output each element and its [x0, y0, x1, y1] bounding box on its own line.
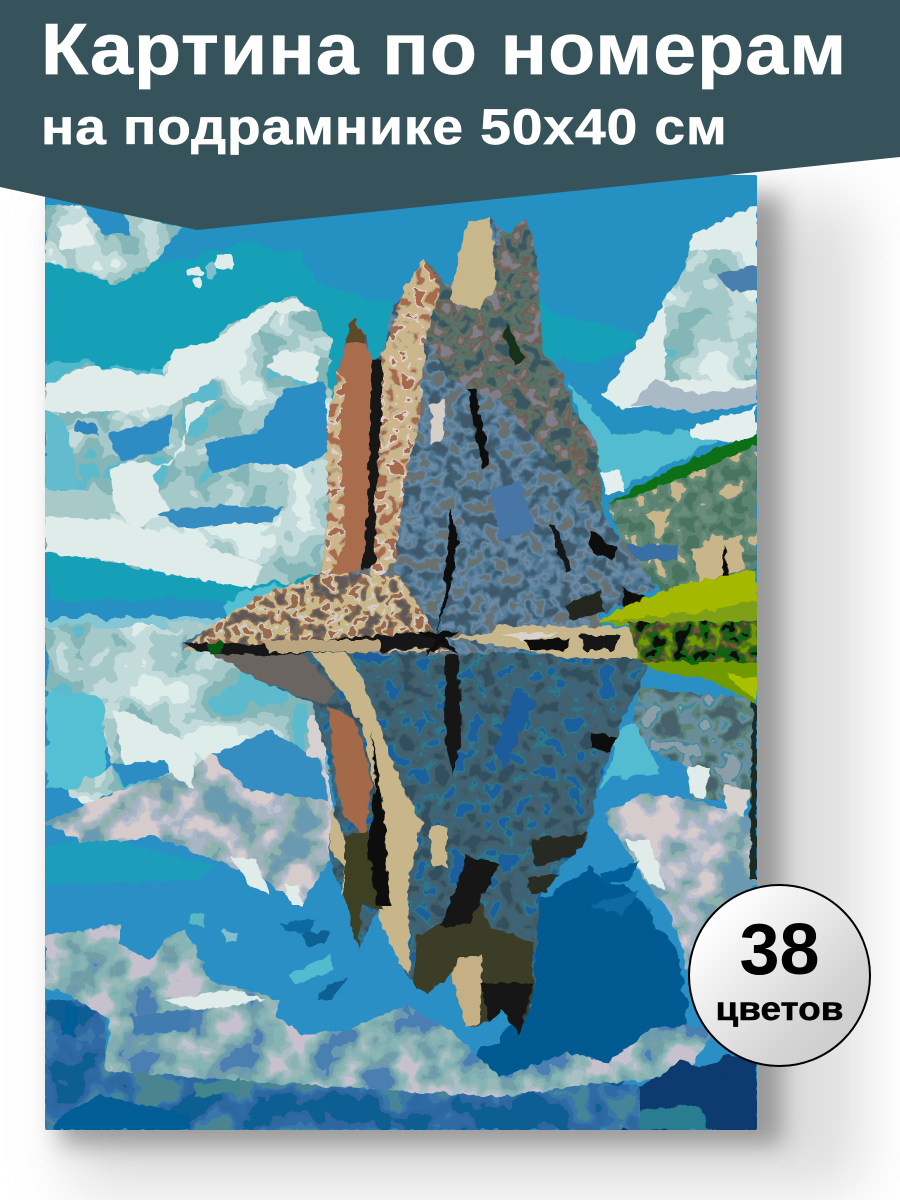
- badge: 38 colours: 38: [739, 910, 820, 990]
- tan ridge: [370, 258, 440, 576]
- right cloud: [600, 205, 760, 495]
- green shore: [597, 570, 757, 705]
- rock reflection: [200, 645, 655, 1040]
- badge: 38 colours: [688, 884, 871, 1067]
- badge: 38 colours: цветов: [716, 990, 843, 1027]
- canvas painting: rock and reflection in a lake: [40, 172, 880, 1200]
- deep water right: [476, 723, 757, 1130]
- canvas shadow: [60, 195, 860, 1190]
- right reflected cloud: [600, 790, 760, 975]
- main left cloud: [45, 290, 340, 595]
- rock: [180, 215, 660, 660]
- header banner: [0, 0, 900, 230]
- rock details: [362, 218, 657, 635]
- lower reflected clouds: [45, 1000, 640, 1130]
- far hill: [608, 434, 757, 592]
- brown spire: [322, 318, 375, 585]
- lake top reflections: [45, 613, 224, 748]
- sky: [45, 175, 757, 625]
- lake cloud: [45, 622, 332, 804]
- teal sky band: [45, 240, 717, 620]
- lake: [45, 618, 757, 1130]
- pink reflected cloud: [45, 750, 335, 910]
- rock base left: [180, 570, 455, 655]
- title: Картина по номерам: [41, 10, 847, 90]
- small clouds top left: [45, 204, 183, 285]
- painting: [45, 175, 760, 1135]
- rock upper warm: [420, 215, 610, 525]
- shoreline: [183, 625, 657, 658]
- subtitle: на подрамнике 50х40 см: [41, 99, 728, 155]
